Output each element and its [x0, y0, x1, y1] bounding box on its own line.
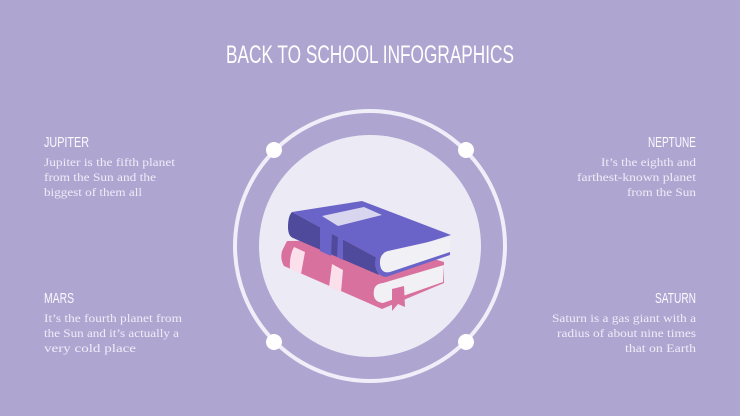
- pink book: [281, 240, 444, 311]
- text block: Saturn: Saturn is a gas giant with a: [552, 311, 697, 325]
- text block: Neptune: from the Sun: [627, 185, 696, 199]
- text block: Mars: It’s the fourth planet from: [44, 311, 183, 325]
- text block: Saturn: radius of about nine times: [557, 326, 696, 340]
- text block: Mars: [44, 290, 183, 355]
- blue book: [288, 201, 451, 277]
- text block: Mars: the Sun and it’s actually a: [44, 326, 180, 340]
- text block: Neptune: farthest-known planet: [577, 170, 697, 184]
- text block: Jupiter: biggest of them all: [44, 185, 143, 199]
- text block: Neptune: [577, 134, 697, 199]
- text block: Neptune: It’s the eighth and: [601, 155, 696, 169]
- text block: Neptune: NEPTUNE: [648, 134, 696, 151]
- text block: Saturn: that on Earth: [625, 341, 696, 355]
- text block: Saturn: SATURN: [655, 290, 696, 307]
- text block: Mars: MARS: [44, 290, 74, 307]
- icon: stack of books: [281, 201, 451, 311]
- text block: Jupiter: [44, 134, 176, 199]
- text block: Jupiter: from the Sun and the: [44, 170, 156, 184]
- text block: Mars: very cold place: [44, 341, 136, 355]
- text block: Jupiter: Jupiter is the fifth planet: [44, 155, 176, 169]
- text block: Saturn: [552, 290, 697, 355]
- inner circle: [259, 135, 481, 357]
- text block: Jupiter: JUPITER: [44, 134, 89, 151]
- diagram: ring with dots: [235, 111, 505, 381]
- title: BACK TO SCHOOL INFOGRAPHICS: [226, 41, 514, 69]
